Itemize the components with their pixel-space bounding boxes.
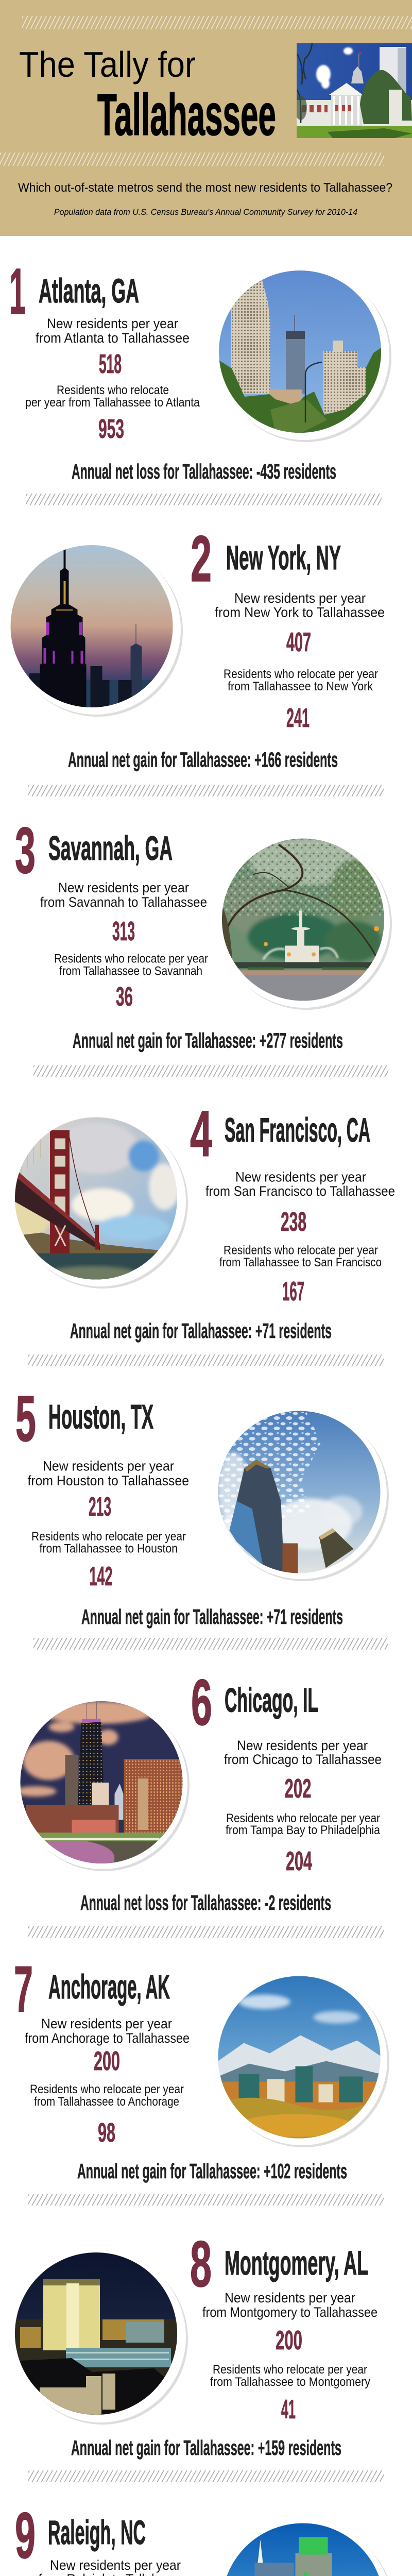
- relocate label: [219, 1244, 382, 1269]
- panel: New York: [10, 522, 385, 796]
- rank number 6: 6: [191, 1666, 212, 1739]
- new residents value: 213: [89, 1492, 111, 1522]
- relocate label: Residents who relocate per year: [213, 2363, 367, 2377]
- new residents label: New residents per year: [234, 590, 366, 606]
- photo: Empire State Building: [10, 544, 183, 717]
- relocate value: 241: [286, 703, 310, 733]
- relocate label: Residents who relocate per year: [31, 1530, 186, 1544]
- rank number 2: 2: [191, 522, 212, 595]
- photo: Montgomery at night: [15, 2251, 188, 2425]
- relocate label: [210, 2363, 370, 2389]
- new residents label: from New York to Tallahassee: [215, 605, 385, 620]
- new residents value: 407: [286, 628, 311, 657]
- relocate label: from Tallahassee to New York: [228, 680, 373, 693]
- city heading: Houston, TX: [48, 1397, 153, 1435]
- new residents label: from Chicago to Tallahassee: [224, 1752, 382, 1767]
- rank number 7: 7: [14, 1953, 33, 2025]
- new residents label: from Atlanta to Tallahassee: [36, 330, 190, 346]
- photo: Forsyth Park fountain: [219, 837, 392, 1010]
- relocate label: Residents who relocate per year: [30, 2082, 184, 2096]
- new residents label: [28, 1458, 189, 1488]
- relocate label: [31, 1530, 186, 1556]
- header banner: [0, 0, 412, 236]
- new residents value: 238: [281, 1207, 306, 1237]
- photo: Atlanta skyline: [218, 269, 391, 442]
- new residents label: New residents per year: [47, 316, 178, 331]
- new residents label: from Anchorage to Tallahassee: [25, 2030, 190, 2046]
- panel: Atlanta: [9, 255, 391, 505]
- relocate value: 98: [98, 2118, 115, 2148]
- new residents label: New residents per year: [50, 2557, 181, 2573]
- rank number 3: 3: [15, 814, 36, 887]
- new residents label: New residents per year: [58, 880, 189, 895]
- panel: San Francisco: 167: [282, 1277, 304, 1307]
- new residents value: 202: [284, 1774, 311, 1804]
- panel: Raleigh: [16, 2512, 387, 2576]
- new residents label: [205, 1170, 395, 1199]
- panel: Houston: [15, 1382, 389, 1650]
- new residents label: from Montgomery to Tallahassee: [202, 2304, 377, 2320]
- photo: Houston towers: [216, 1408, 389, 1581]
- rank number 9: 9: [15, 2499, 36, 2572]
- new residents value: 313: [112, 917, 135, 946]
- new residents value: 518: [99, 349, 122, 379]
- relocate label: [226, 1811, 381, 1837]
- rank number 4: 4: [190, 1097, 212, 1170]
- relocate label: [224, 667, 378, 693]
- relocate label: from Tallahassee to Anchorage: [34, 2095, 179, 2109]
- relocate label: from Tallahassee to Houston: [39, 1541, 178, 1556]
- photo: Golden Gate Bridge: [10, 1115, 188, 1289]
- city heading: Raleigh, NC: [48, 2513, 146, 2551]
- panel: Chicago: [15, 1666, 384, 1938]
- new residents label: [224, 1738, 382, 1767]
- panel: Savannah: [15, 814, 392, 1077]
- relocate label: [30, 2082, 184, 2109]
- panel: Montgomery: [15, 2228, 384, 2482]
- relocate value: 36: [116, 982, 133, 1012]
- panel: San Francisco: [10, 1097, 395, 1366]
- panel: Anchorage: Anchorage, AK: [48, 1968, 170, 2006]
- new residents label: New residents per year: [43, 1458, 174, 1473]
- new residents label: [202, 2290, 377, 2320]
- city heading: Atlanta, GA: [39, 272, 139, 310]
- new residents label: New residents per year: [225, 2290, 355, 2306]
- new residents label: [36, 316, 190, 346]
- photo: Raleigh skyline: [227, 2523, 387, 2576]
- city heading: Savannah, GA: [48, 829, 173, 867]
- data source note: Population data from U.S. Census Bureau's Annual Community Survey for 2010-14: [54, 207, 357, 217]
- relocate value: 204: [286, 1846, 312, 1876]
- relocate label: Residents who relocate per year: [224, 1244, 378, 1257]
- relocate value: 953: [98, 414, 124, 444]
- new residents label: New residents per year: [41, 2016, 172, 2031]
- relocate label: Residents who relocate: [57, 383, 169, 397]
- relocate label: from Tampa Bay to Philadelphia: [226, 1823, 381, 1837]
- relocate label: [25, 383, 200, 410]
- new residents label: [25, 2016, 190, 2046]
- photo: Chicago skyline: [15, 1698, 190, 1871]
- relocate label: Residents who relocate per year: [226, 1811, 380, 1825]
- city heading: Chicago, IL: [225, 1681, 318, 1719]
- relocate value: 142: [90, 1562, 112, 1591]
- relocate label: Residents who relocate per year: [224, 667, 378, 681]
- photo: Anchorage city and mountains: [216, 1974, 389, 2147]
- new residents value: 200: [276, 2326, 302, 2355]
- new residents label: from Houston to Tallahassee: [28, 1473, 189, 1488]
- rank number 8: 8: [190, 2228, 212, 2300]
- subtitle question: Which out-of-state metros send the most new residents to Tallahassee?: [18, 181, 392, 195]
- relocate label: from Tallahassee to Savannah: [59, 964, 202, 978]
- new residents label: from Savannah to Tallahassee: [40, 894, 207, 910]
- relocate label: per year from Tallahassee to Atlanta: [25, 396, 200, 410]
- panel: Montgomery: 41: [281, 2395, 296, 2425]
- rank number 5: 5: [15, 1382, 36, 1455]
- relocate label: [54, 952, 208, 978]
- new residents label: New residents per year: [237, 1738, 368, 1753]
- photo: Florida capitol: [295, 43, 412, 138]
- title line one: The Tally for: [19, 44, 196, 84]
- panel: Anchorage: [14, 1953, 389, 2206]
- new residents label: [215, 590, 385, 620]
- new residents value: 200: [94, 2046, 120, 2076]
- panel: Atlanta: 1: [9, 255, 26, 328]
- relocate label: from Tallahassee to San Francisco: [219, 1256, 382, 1269]
- new residents label: New residents per year: [235, 1170, 366, 1185]
- relocate label: from Tallahassee to Montgomery: [210, 2375, 370, 2389]
- relocate label: Residents who relocate per year: [54, 952, 208, 965]
- new residents label: [40, 880, 207, 910]
